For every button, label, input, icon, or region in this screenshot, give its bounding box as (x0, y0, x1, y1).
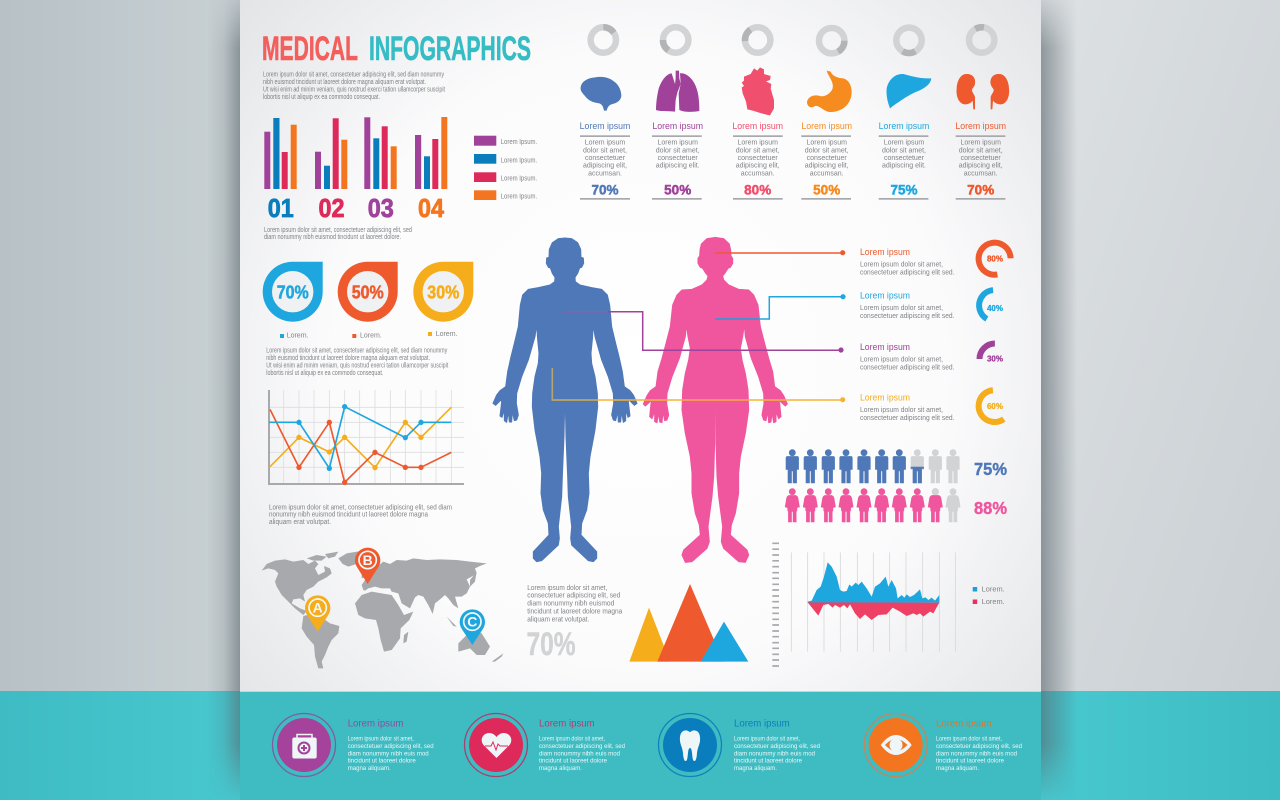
organ column 3: 80% (744, 182, 771, 197)
organ column 5: Lorem ipsum (879, 121, 930, 131)
drop text block (266, 348, 448, 377)
line chart caption: aliquam erat volutpat. (269, 519, 331, 526)
intro text block: Lorem ipsum dolor sit amet, consectetuer adipiscing elit, sed diam nonummy (263, 72, 444, 78)
callout 1: Lorem ipsum (860, 247, 910, 257)
organ column 1: adipiscing elit, (583, 163, 627, 170)
organ column 5 (879, 121, 930, 200)
organ column 6: Lorem ipsum (960, 139, 1001, 146)
bar chart caption: diam nonummy nibh euismod tincidunt ut laoreet dolore. (264, 234, 401, 241)
bar group numbers (268, 193, 444, 223)
organ column 2: 50% (664, 182, 691, 197)
organ column 5: adipiscing elit. (882, 163, 926, 170)
callout 3: Lorem ipsum dolor sit amet, (860, 356, 943, 363)
triangle chart (629, 584, 748, 662)
feature: tooth: tincidunt ut laoreet dolore (734, 758, 802, 765)
organ column 5: 75% (890, 182, 918, 197)
drop 70%: 70% (277, 282, 309, 302)
pin A: A (313, 600, 323, 616)
feature: tooth: Lorem ipsum (734, 719, 790, 730)
organ column 2: consectetuer (658, 155, 698, 162)
organ column 6: dolor sit amet, (959, 147, 1003, 154)
callout 4 (860, 393, 955, 422)
organ column 4: consectetuer (807, 155, 847, 162)
organ column 4: adipiscing elit, (805, 163, 849, 170)
feature: eye (864, 714, 1022, 776)
title (262, 30, 531, 68)
callout 2: consectetuer adipiscing elit sed. (860, 313, 955, 320)
series: red area (808, 602, 939, 620)
feature: heart: diam nonummy nibh euis mod (539, 750, 620, 757)
organ column 1: 70% (591, 182, 619, 197)
drop legend: Lorem. (436, 331, 458, 338)
feature: first aid: Lorem ipsum (348, 719, 403, 730)
mid text block (527, 585, 622, 623)
male body (493, 238, 637, 562)
feature: eye: tincidunt ut laoreet dolore (936, 758, 1004, 765)
organ column 1 (580, 121, 631, 200)
feature: eye: Lorem ipsum dolor sit amet, (936, 735, 1002, 742)
large 70%: 70% (526, 626, 576, 662)
organ column 4: dolor sit amet, (805, 147, 849, 154)
bar chart caption: Lorem ipsum dolor sit amet, consectetuer adipiscing elit, sed (264, 227, 412, 234)
female pictogram row (785, 488, 960, 522)
icon: brain (581, 77, 621, 111)
callout 4: consectetuer adipiscing elit sed. (860, 415, 955, 422)
callout 4: Lorem ipsum dolor sit amet, (860, 407, 943, 414)
feature: first aid: tincidunt ut laoreet dolore (348, 758, 416, 765)
bar group numbers: 02 (318, 193, 344, 223)
intro text block: lobortis nisl ut aliquip ex ea commodo consequat. (263, 94, 380, 101)
feature: tooth (658, 714, 820, 776)
connector: blue (715, 294, 846, 319)
organ column 5: Lorem ipsum (884, 139, 924, 146)
organ column 2: adipiscing elit. (656, 163, 700, 170)
pin A (305, 595, 330, 632)
drop text block: Ut wisi enim ad minim veniam, quis nostrud exerci tation ullamcorper suscipit (266, 362, 448, 370)
bar group numbers: 04 (418, 193, 444, 223)
icon: tooth (680, 730, 700, 761)
organ column 6: adipiscing elit, (959, 163, 1003, 170)
drop legend: Lorem. (360, 332, 382, 340)
callout 3: consectetuer adipiscing elit sed. (860, 364, 955, 371)
organ column 3: dolor sit amet, (736, 147, 780, 154)
icon: lungs (656, 71, 699, 112)
feature: heart: tincidunt ut laoreet dolore (539, 758, 607, 765)
organ column 6 (955, 121, 1006, 200)
area chart legend (973, 586, 1005, 606)
organ column 1: dolor sit amet, (583, 147, 627, 154)
line chart (269, 390, 464, 485)
organ icons (581, 67, 1009, 115)
bar chart legend: Lorem Ipsum. (501, 176, 537, 183)
organ column 2: Lorem ipsum (657, 139, 698, 146)
bar chart legend (474, 136, 537, 201)
drop 30% (413, 262, 473, 322)
gauge 60% (972, 384, 1017, 428)
female body (643, 237, 787, 562)
organ column 3: Lorem ipsum (732, 121, 783, 131)
feature: eye: diam nonummy nibh euis mod (936, 750, 1017, 757)
connector: red (715, 250, 845, 255)
icon: stomach (807, 71, 852, 112)
icon: kidneys (957, 74, 1009, 109)
bar chart legend: Lorem Ipsum. (501, 139, 537, 146)
mid text block: Lorem ipsum dolor sit amet, (527, 585, 607, 592)
drop legend (280, 331, 458, 340)
gauge 40%: 40% (987, 304, 1003, 313)
feature: eye: Lorem ipsum (936, 719, 992, 730)
drop text block: lobortis nisl ut aliquip ex ea commodo consequat. (266, 370, 383, 377)
organ column 6: accumsan. (964, 171, 998, 178)
series: yellow (270, 407, 451, 470)
connector lines (552, 250, 846, 402)
series: blue area (808, 562, 939, 603)
title: INFOGRAPHICS (369, 30, 531, 68)
drop text block: Lorem ipsum dolor sit amet, consectetuer adipiscing elit, sed diam nonummy (266, 348, 448, 355)
area chart (772, 543, 955, 666)
feature: tooth: consectetuer adipiscing elit, sed (734, 743, 820, 750)
feature: first aid: diam nonummy nibh euis mod (348, 750, 429, 757)
mid text block: tincidunt ut laoreet dolore magna (527, 608, 622, 615)
bar chart caption (264, 227, 412, 241)
icon: liver (886, 74, 931, 108)
organ column 3: accumsan. (741, 171, 775, 178)
icon: medical kit (292, 734, 317, 758)
series: blue (269, 404, 451, 471)
arc gauges (972, 240, 1017, 428)
gauge 30% (980, 344, 1010, 374)
bar chart legend: Lorem Ipsum. (501, 194, 537, 201)
organ column 1: Lorem ipsum (580, 121, 631, 131)
feature: heart: Lorem ipsum (539, 719, 595, 730)
callout 2: Lorem ipsum dolor sit amet, (860, 305, 943, 312)
mid text block: consectetuer adipiscing elit, sed (527, 593, 620, 600)
organ column 3 (732, 121, 783, 200)
intro text block (263, 72, 445, 101)
gauge 80%: 80% (987, 255, 1003, 264)
male percentage: 75% (974, 459, 1007, 479)
intro text block: nibh euismod tincidunt ut laoreet dolore magna aliquam erat volutpat. (263, 79, 426, 86)
donut row (591, 22, 999, 58)
feature: tooth: Lorem ipsum dolor sit amet, (734, 735, 800, 742)
organ column 2: dolor sit amet, (656, 147, 700, 154)
female percentage: 88% (974, 498, 1007, 518)
organ column 6: Lorem ipsum (955, 121, 1006, 131)
line chart caption: Lorem ipsum dolor sit amet, consectetuer adipiscing elit, sed diam (269, 504, 452, 512)
callout 1 (860, 247, 955, 277)
organ column 1: consectetuer (585, 155, 626, 162)
organ column 4: accumsan. (810, 171, 844, 178)
organ column 3: adipiscing elit, (736, 163, 780, 170)
icon: heart organ (742, 67, 774, 115)
connector: purple (562, 312, 844, 353)
callout 1: consectetuer adipiscing elit sed. (860, 270, 955, 277)
callout 1: Lorem ipsum dolor sit amet, (860, 262, 943, 269)
feature: first aid: consectetuer adipiscing elit, sed (348, 743, 434, 750)
callout 3: Lorem ipsum (860, 342, 910, 352)
gauge 40% (973, 284, 1016, 327)
bar chart (264, 117, 447, 223)
line chart caption (269, 504, 452, 526)
gauge 60%: 60% (987, 402, 1003, 411)
series: red (270, 409, 451, 485)
pin C: C (467, 614, 477, 630)
drop 30%: 30% (427, 282, 459, 302)
organ column 2: Lorem ipsum (652, 121, 703, 131)
icon: heart with pulse (482, 733, 511, 758)
organ column 3: Lorem ipsum (737, 139, 778, 146)
organ column 4: Lorem ipsum (806, 139, 847, 146)
bar group numbers: 01 (268, 193, 294, 223)
area chart legend: Lorem. (982, 586, 1005, 594)
bar group numbers: 03 (368, 193, 394, 223)
organ column 1: Lorem ipsum (585, 139, 625, 146)
feature: heart (464, 714, 625, 776)
organ column 2 (652, 121, 703, 200)
title: MEDICAL (262, 30, 358, 68)
drop 50%: 50% (352, 282, 384, 302)
drop 50% (338, 262, 398, 322)
bottom teal band (240, 691, 1041, 800)
organ column 4: Lorem ipsum (801, 121, 852, 131)
line chart caption: nonummy nibh euismod tincidunt ut laoreet dolore magna (269, 512, 428, 518)
mid text block: aliquam erat volutpat. (527, 616, 589, 623)
area chart legend: Lorem. (982, 599, 1005, 606)
drop legend: Lorem. (287, 332, 309, 340)
organ column 4: 50% (813, 182, 840, 197)
pin B: B (363, 552, 373, 568)
feature: tooth: diam nonummy nibh euis mod (734, 750, 815, 757)
pin B (355, 548, 380, 584)
organ column 5: dolor sit amet, (882, 147, 926, 154)
organ column 1: accumsan. (588, 171, 622, 178)
feature: first aid (272, 714, 434, 776)
connector: yellow (552, 368, 845, 402)
organ column 5: consectetuer (884, 155, 925, 162)
organ column 3: consectetuer (738, 155, 778, 162)
feature: first aid: Lorem ipsum dolor sit amet, (348, 735, 414, 742)
feature: heart: consectetuer adipiscing elit, sed (539, 743, 625, 750)
percentage drops (263, 262, 473, 322)
mid text block: diam nonummy nibh euismod (527, 600, 614, 607)
callout 4: Lorem ipsum (860, 393, 910, 403)
feature: eye: consectetuer adipiscing elit, sed (936, 743, 1022, 750)
callout 3 (860, 342, 955, 371)
gauge 30%: 30% (987, 355, 1003, 364)
pin C (460, 609, 485, 645)
organ column 6: consectetuer (961, 155, 1001, 162)
feature: tooth: magna aliquam. (734, 765, 777, 772)
organ column 4 (801, 121, 852, 200)
feature: heart: Lorem ipsum dolor sit amet, (539, 735, 605, 742)
world map (262, 548, 503, 668)
paper sheet (240, 0, 1041, 691)
feature: heart: magna aliquam. (539, 765, 582, 772)
drop text block: nibh euismod tincidunt ut laoreet dolore magna aliquam erat volutpat. (266, 355, 430, 362)
icon: eye (881, 735, 912, 755)
feature: first aid: magna aliquam. (348, 765, 391, 772)
male pictogram row (786, 449, 960, 483)
bar chart legend: Lorem Ipsum. (501, 157, 537, 164)
callout 2: Lorem ipsum (860, 290, 910, 300)
callout 2 (860, 290, 955, 320)
organ column 6: 70% (967, 182, 994, 197)
drop 70% (263, 262, 323, 322)
feature: eye: magna aliquam. (936, 765, 979, 772)
intro text block: Ut wisi enim ad minim veniam, quis nostrud exerci tation ullamcorper suscipit (263, 86, 445, 94)
gauge 80% (976, 240, 1013, 277)
